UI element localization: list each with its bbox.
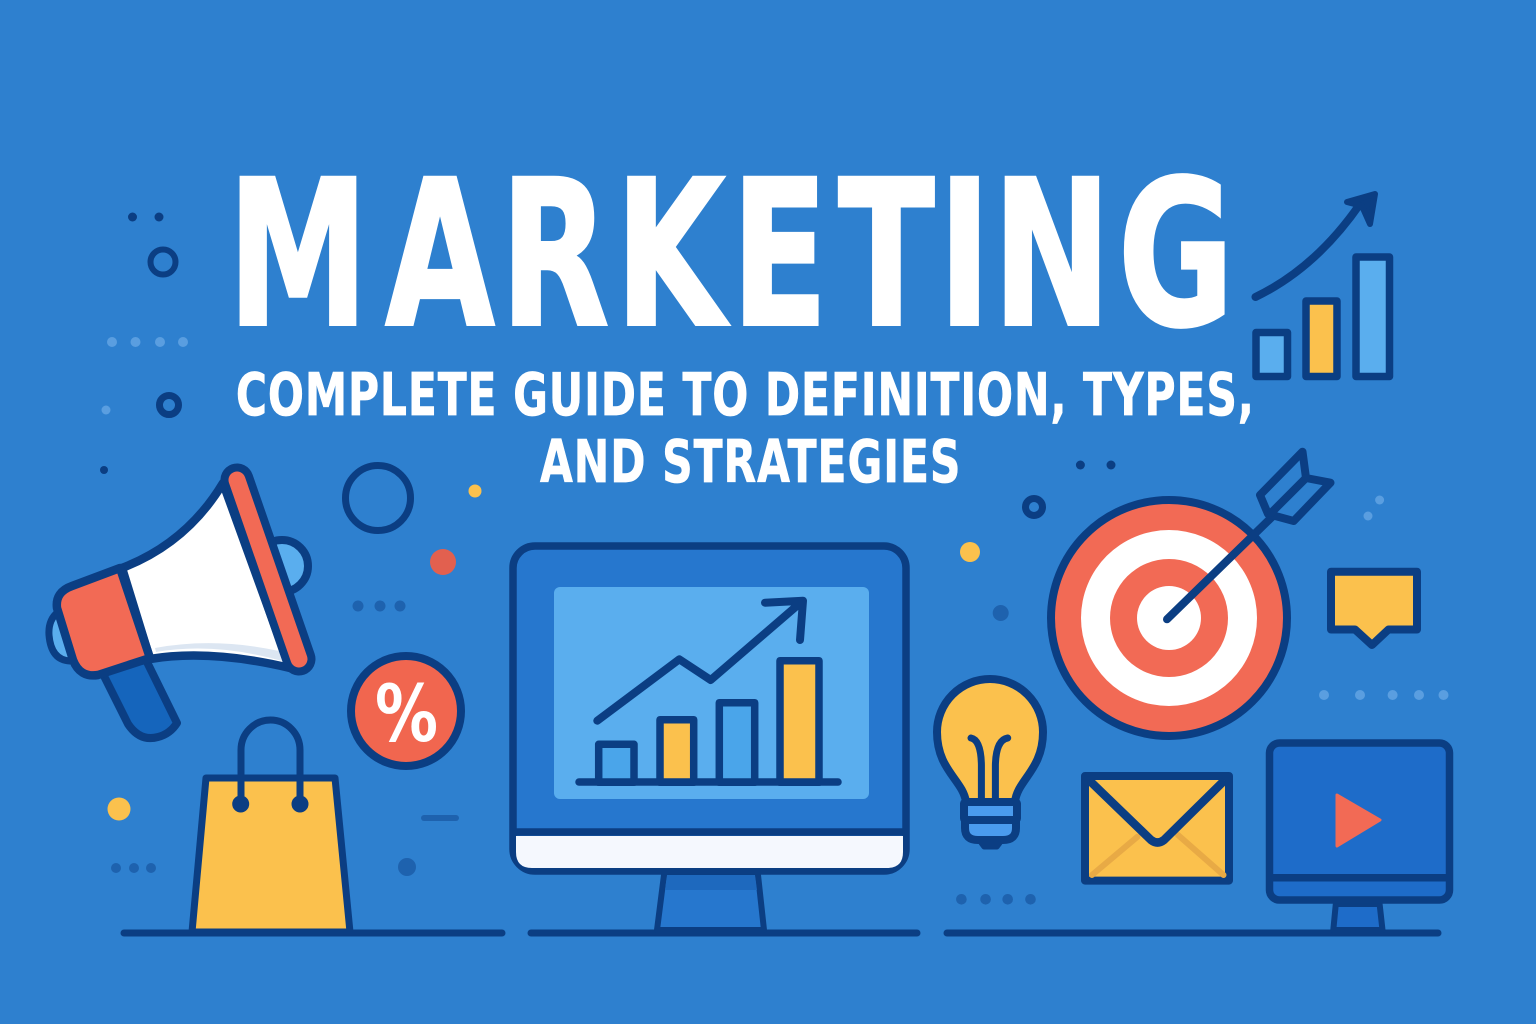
subtitle: COMPLETE GUIDE TO DEFINITION, TYPES, — [236, 361, 1254, 430]
arrow — [1167, 452, 1330, 619]
subtitle: AND STRATEGIES — [540, 428, 960, 497]
icon: megaphone — [49, 480, 308, 738]
decorative ring — [346, 466, 410, 530]
megaphone speaker — [256, 540, 308, 592]
monitor chin — [516, 836, 903, 868]
decorative dots: top left — [100, 212, 188, 474]
decorative dots: centre right — [956, 460, 1448, 905]
subtitle — [236, 361, 1254, 497]
bar chart — [579, 661, 838, 782]
icon: percent badge: % — [375, 670, 438, 760]
megaphone rear body — [57, 568, 150, 675]
icon: envelope — [1085, 776, 1229, 881]
monitor stand — [657, 875, 764, 930]
icon: target with arrow — [1051, 452, 1330, 736]
monitor body — [513, 546, 906, 871]
megaphone handle — [100, 660, 177, 738]
icon: video monitor — [1270, 743, 1450, 930]
decorative dots: bottom left — [108, 798, 459, 876]
trend arrow — [597, 601, 803, 721]
icon: percent badge — [351, 656, 461, 766]
megaphone rim — [237, 480, 299, 659]
megaphone back cap — [49, 612, 70, 661]
icon: light bulb — [937, 679, 1043, 847]
icon: desktop monitor — [513, 546, 906, 930]
ground lines — [124, 930, 1438, 936]
icon: growth chart top right — [1256, 194, 1390, 376]
decorative dots: centre left — [352, 484, 482, 612]
play button — [1337, 795, 1380, 846]
title: MARKETING — [228, 138, 1234, 373]
icon: shopping bag — [192, 720, 350, 932]
megaphone horn — [122, 483, 290, 668]
icon: chat bubble — [1331, 572, 1417, 645]
monitor screen — [554, 587, 869, 799]
